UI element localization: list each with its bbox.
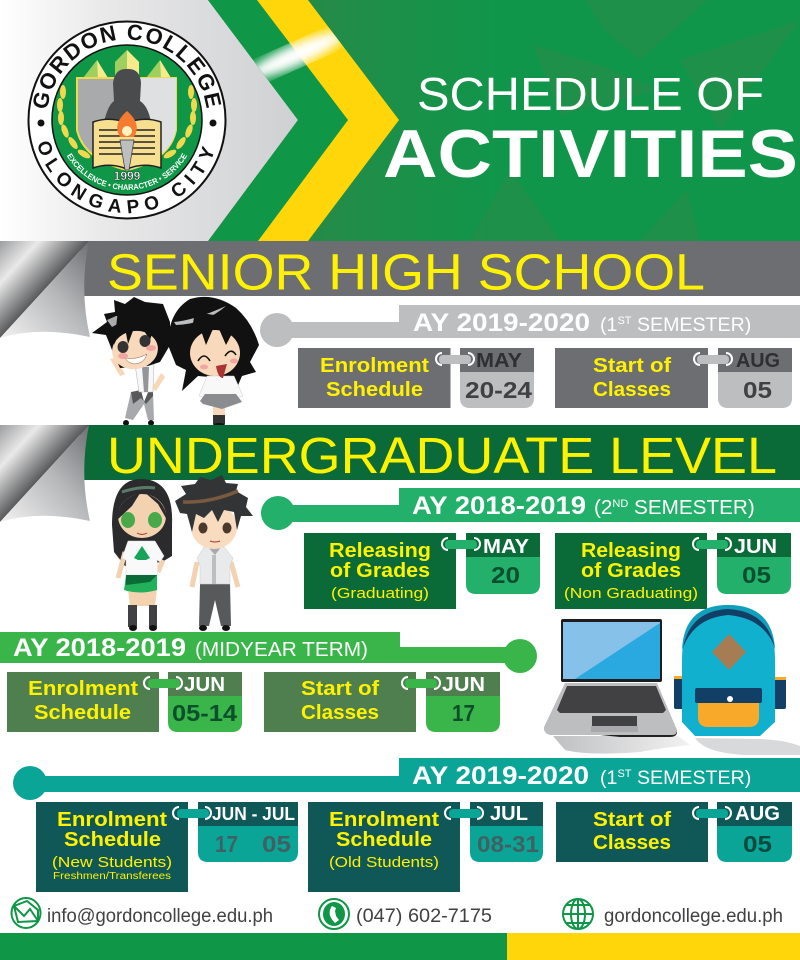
timeline bar	[0, 632, 537, 673]
title line one: SCHEDULE OF	[417, 68, 764, 120]
date: jun 17: JUN	[442, 674, 485, 696]
card: releasing graduating: Releasing	[329, 539, 431, 562]
card: enrolment old students: Schedule	[336, 828, 432, 851]
card: enrolment new students: Freshmen/Transferees	[53, 871, 171, 882]
bar subheading: ST	[617, 315, 632, 327]
bar subheading: (2	[594, 496, 612, 519]
connector	[693, 538, 731, 550]
bar subheading: (1	[600, 767, 617, 789]
date: jul 08-31: 08-31	[477, 831, 539, 857]
card: releasing non graduating: (Non Graduating)	[564, 585, 698, 602]
card: enrolment	[7, 672, 159, 732]
girl	[112, 479, 172, 631]
date: may 20: MAY	[483, 536, 530, 558]
date: aug 05: AUG	[735, 803, 780, 825]
section: undergraduate AY 2019-2020	[13, 758, 800, 892]
page curl	[0, 425, 90, 522]
date: aug 05: 05	[743, 831, 772, 857]
crystals	[83, 50, 171, 78]
date: jun-jul 17 05	[198, 802, 298, 862]
footer band	[0, 933, 800, 960]
bar subheading: (1	[600, 314, 617, 336]
connector	[693, 807, 731, 819]
card: enrolment new students: Schedule	[64, 828, 161, 851]
connector	[442, 538, 480, 550]
founding year: 1999	[114, 169, 141, 183]
header banner	[0, 0, 800, 241]
bar subheading: ST	[617, 768, 632, 780]
characters: senior high students	[92, 297, 259, 427]
card: enrolment old students: Enrolment	[329, 808, 439, 831]
date: may 20: 20	[491, 562, 520, 588]
glare highlight	[253, 26, 344, 82]
date: aug 05: AUG	[736, 350, 780, 372]
shield	[77, 78, 176, 170]
timeline bar	[13, 758, 800, 800]
date: may 20	[466, 533, 540, 594]
card: releasing graduating: (Graduating)	[331, 585, 429, 602]
section: undergraduate AY 2018-2019 second semester	[261, 488, 800, 609]
girl	[168, 297, 259, 427]
bar subheading: SEMESTER)	[632, 767, 751, 789]
title	[383, 68, 798, 192]
card: start of classes	[556, 802, 708, 862]
card: start of classes: Start of	[301, 677, 379, 700]
date: jun 05: 05	[742, 562, 771, 588]
heading text: UNDERGRADUATE LEVEL	[107, 427, 777, 484]
seal bullets	[38, 120, 216, 126]
card: start of classes	[555, 348, 708, 408]
statue	[104, 69, 151, 122]
bar heading: AY 2019-2020	[412, 762, 589, 790]
card: enrolment: Enrolment	[320, 354, 429, 377]
date: jun-jul 17 05: 05	[262, 831, 291, 857]
page curl	[0, 241, 90, 338]
characters: undergraduate students	[112, 475, 253, 631]
timeline bar	[260, 305, 800, 347]
date: may 20-24: MAY	[476, 350, 523, 372]
date: jun 05	[717, 533, 791, 594]
title line two: ACTIVITIES	[383, 116, 798, 192]
bar subheading: SEMESTER)	[628, 496, 755, 519]
date: aug 05: 05	[743, 377, 772, 403]
date: may 20-24	[460, 348, 534, 408]
date: may 20-24: 20-24	[465, 377, 532, 403]
date: jun 05: JUN	[734, 536, 777, 558]
card: releasing non graduating: Releasing	[581, 539, 681, 562]
date: aug 05	[718, 348, 792, 408]
connector	[445, 807, 483, 819]
card: start of classes: Classes	[593, 378, 671, 401]
card: start of classes: Classes	[301, 701, 379, 724]
date: jun-jul 17 05: JUN - JUL	[212, 804, 295, 824]
icon: globe	[563, 899, 593, 929]
email address: info@gordoncollege.edu.ph	[47, 906, 273, 927]
bar subheading: SEMESTER)	[632, 314, 751, 336]
connector	[694, 353, 732, 365]
date: jun-jul 17 05: 17	[215, 831, 238, 857]
card: start of classes	[264, 672, 416, 732]
yellow chevron band	[257, 0, 399, 241]
backpack patch	[712, 634, 746, 670]
card: enrolment new students: Enrolment	[57, 808, 167, 831]
card: enrolment: Schedule	[326, 378, 423, 401]
card: start of classes: Start of	[593, 808, 671, 831]
card: enrolment	[298, 348, 450, 408]
icon: phone	[319, 899, 349, 929]
bar heading: AY 2018-2019	[13, 634, 186, 662]
date: jul 08-31	[470, 802, 543, 862]
connector	[436, 353, 474, 365]
card: releasing non graduating	[555, 533, 707, 609]
bar subheading: (MIDYEAR TERM)	[195, 639, 368, 661]
date: jun 05-14	[168, 672, 242, 732]
card: releasing graduating: of Grades	[330, 559, 430, 582]
bar heading: AY 2019-2020	[413, 309, 590, 337]
grey chevron	[0, 0, 298, 241]
laurels	[57, 85, 197, 160]
seal text top: GORDON COLLEGE	[33, 24, 222, 108]
heading text: SENIOR HIGH SCHOOL	[107, 244, 705, 300]
bar subheading: ND	[612, 498, 628, 510]
date: jul 08-31: JUL	[490, 803, 528, 825]
icon: email	[12, 898, 40, 928]
college logo seal	[28, 20, 226, 220]
contact row	[12, 898, 783, 929]
date: jun 05-14: 05-14	[172, 700, 237, 726]
motto: EXCELLENCE • CHARACTER • SERVICE	[66, 153, 188, 190]
section: midyear term	[0, 632, 537, 732]
green chevron band	[208, 0, 348, 241]
bar heading: AY 2018-2019	[412, 492, 586, 520]
connector	[144, 677, 182, 689]
card: start of classes: Classes	[593, 831, 671, 854]
connector	[402, 677, 440, 689]
card: enrolment new students	[36, 802, 188, 892]
open book	[93, 119, 161, 169]
card: enrolment old students	[308, 802, 460, 892]
card: releasing graduating	[304, 533, 456, 609]
section: senior high school heading	[0, 241, 800, 338]
backpack pocket	[698, 703, 759, 727]
date: jun 05-14: JUN	[184, 674, 225, 696]
card: enrolment: Schedule	[34, 701, 131, 724]
card: enrolment old students: (Old Students)	[329, 854, 439, 871]
website: gordoncollege.edu.ph	[604, 906, 783, 927]
date: aug 05	[717, 802, 792, 862]
seal text bottom: OLONGAPO CITY	[38, 142, 214, 214]
date: jun 17	[426, 672, 500, 732]
card: start of classes: Start of	[593, 354, 671, 377]
connector	[173, 807, 211, 819]
torch	[120, 140, 134, 170]
section: senior high AY 2019-2020	[260, 305, 800, 408]
boy	[92, 297, 170, 426]
phone number: (047) 602-7175	[356, 906, 492, 927]
card: enrolment new students: (New Students)	[52, 854, 172, 871]
illustration: backpack	[674, 605, 800, 755]
boy	[175, 475, 253, 631]
section: undergraduate level heading	[0, 425, 800, 522]
card: releasing non graduating: of Grades	[581, 559, 681, 582]
timeline bar	[261, 488, 800, 530]
card: enrolment: Enrolment	[28, 677, 138, 700]
illustration: laptop	[544, 619, 690, 754]
date: jun 17: 17	[452, 700, 475, 726]
